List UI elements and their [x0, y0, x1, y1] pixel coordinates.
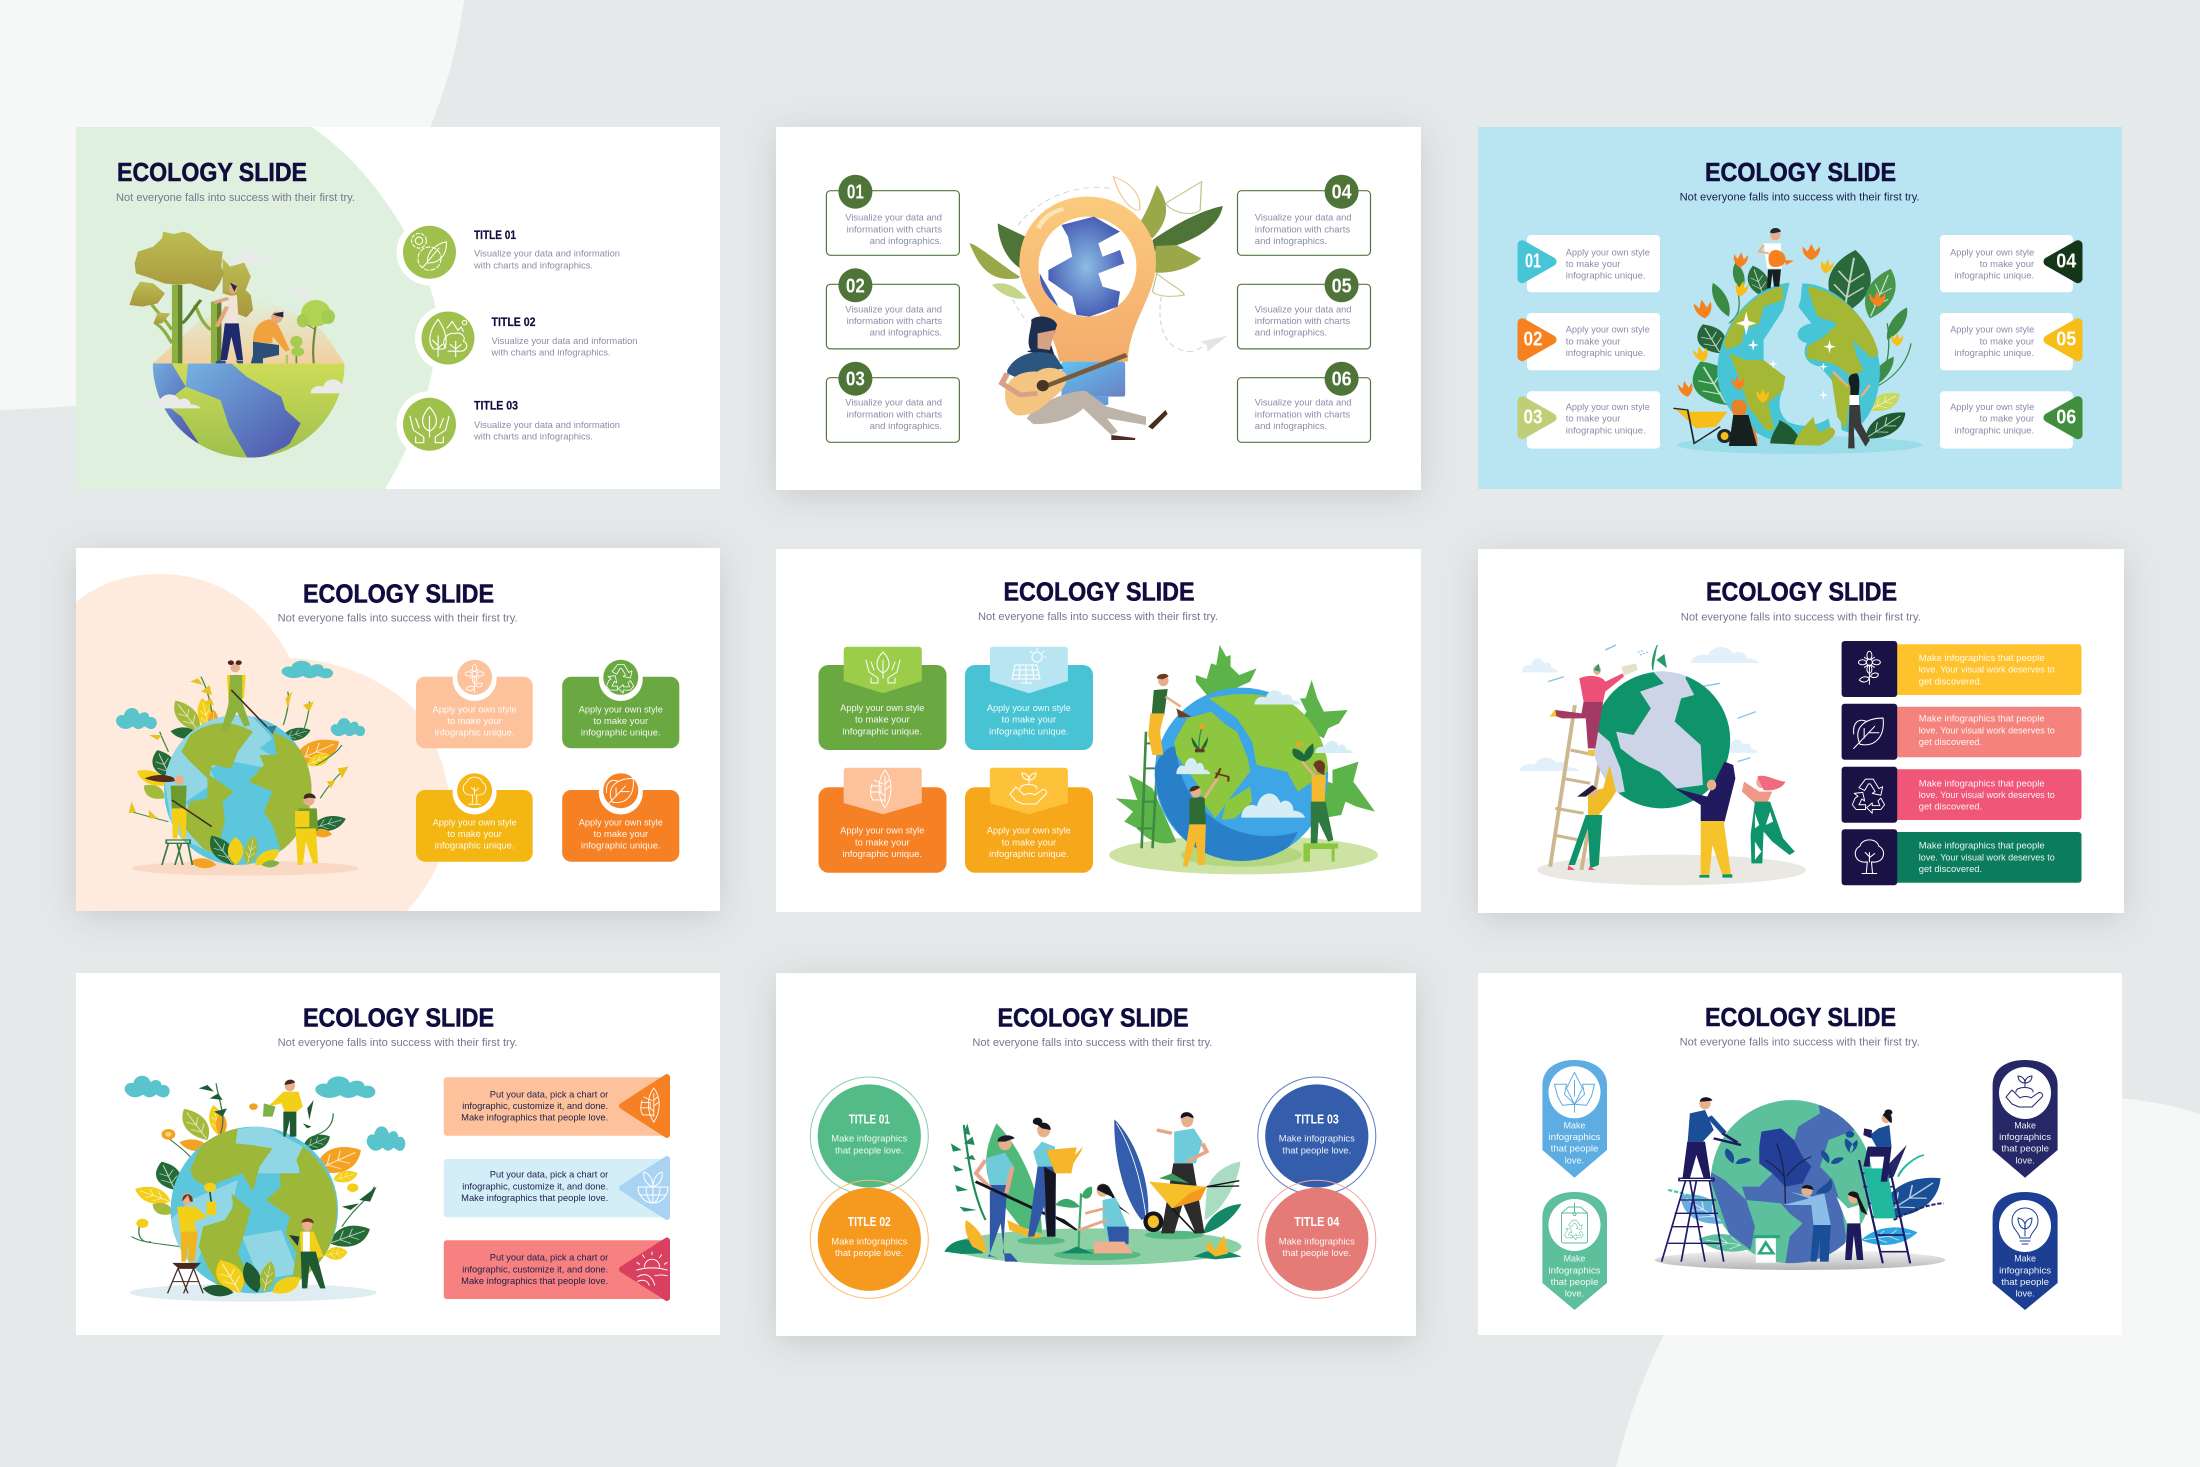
box 05: 05	[1332, 275, 1352, 297]
card 06: infographic unique.	[1954, 425, 2034, 435]
circle: title 01	[810, 1077, 928, 1195]
box 02	[826, 268, 959, 349]
slide 5 background	[776, 549, 1421, 912]
box 04: and infographics.	[1255, 236, 1327, 246]
card: orange: to make your	[855, 837, 910, 847]
card: green: to make your	[855, 715, 910, 725]
icon: bulb with leaves	[2012, 1208, 2038, 1244]
bar 4: green: love. Your visual work deserves to	[1919, 852, 2055, 862]
pin: blue	[1542, 1060, 1607, 1178]
card 05	[1940, 313, 2078, 370]
bar 3: pink	[1842, 767, 2082, 823]
card 05: Apply your own style	[1950, 325, 2034, 335]
item 1: title and text: Visualize your data and information	[474, 249, 620, 259]
slide 1 subtitle: Not everyone falls into success with their first try.	[116, 192, 355, 204]
card 03: Apply your own style	[1566, 402, 1650, 412]
card: yellow: infographic unique.	[435, 841, 514, 851]
slide 6 background	[1478, 549, 2124, 913]
circle: title 04	[1258, 1180, 1376, 1298]
item 3: title and text: TITLE 03	[474, 399, 518, 413]
box 04	[1238, 175, 1370, 255]
box 05: information with charts	[1255, 316, 1351, 326]
card: cyan: infographic unique.	[989, 726, 1069, 736]
card: amber	[965, 768, 1093, 873]
bar 2: coral	[1842, 704, 2082, 760]
arrow card: light blue	[444, 1159, 668, 1217]
item 1: title and text: with charts and infographics.	[473, 260, 593, 270]
pin: green	[1542, 1192, 1607, 1310]
panel: slide 2 six numbered boxes with light bulb	[776, 127, 1421, 490]
icon: leaf	[1854, 718, 1883, 748]
card: orange: infographic unique.	[842, 849, 922, 859]
item 2: icon circle	[415, 305, 481, 371]
box 06: 06	[1332, 369, 1352, 391]
pin: green: infographics	[1548, 1265, 1601, 1275]
box 04: information with charts	[1255, 224, 1351, 234]
card 01	[1522, 235, 1660, 292]
box 02: 02	[846, 275, 865, 297]
bar 3: pink: Make infographics that people	[1919, 778, 2045, 788]
card 02: Apply your own style	[1566, 325, 1650, 335]
slide 1 heading: ECOLOGY SLIDE	[117, 157, 307, 187]
bar 2: coral: get discovered.	[1919, 737, 1982, 747]
pin: royal blue: that people	[2001, 1277, 2049, 1287]
bar 4: green: Make infographics that people	[1919, 841, 2045, 851]
slide 9 heading: ECOLOGY SLIDE	[1705, 1002, 1896, 1032]
card: peach: infographic unique.	[435, 728, 514, 738]
card 01: 01	[1525, 251, 1541, 273]
card: amber: infographic unique.	[989, 849, 1069, 859]
card 05: infographic unique.	[1954, 348, 2034, 358]
icon: recycle	[1852, 779, 1885, 813]
slide 9 illustration: globe with tree planters	[1655, 1097, 1952, 1270]
card 06	[1940, 391, 2078, 449]
icon: recycle	[606, 664, 634, 693]
box 06	[1238, 362, 1370, 442]
item 1: title and text	[473, 228, 620, 270]
card: orange: to make your	[594, 829, 648, 839]
icon: tree	[1855, 840, 1884, 874]
slide 5 illustration: globe with gardeners	[1109, 645, 1378, 874]
circle: title 04: Make infographics	[1279, 1236, 1355, 1246]
box 06: Visualize your data and	[1255, 398, 1352, 408]
pin: royal blue	[1993, 1192, 2058, 1310]
slide 9 background	[1478, 973, 2122, 1335]
pin: navy	[1993, 1060, 2058, 1178]
card 03: infographic unique.	[1566, 425, 1646, 435]
card 03	[1522, 391, 1660, 449]
circle: title 03: Make infographics	[1279, 1134, 1355, 1144]
card: green	[818, 647, 946, 750]
card: yellow: to make your	[447, 829, 502, 839]
circle: title 03	[1258, 1077, 1376, 1195]
card 01: Apply your own style	[1566, 247, 1650, 257]
slide 1 illustration: trees and half earth	[129, 232, 362, 463]
circle: title 01: that people love.	[835, 1145, 904, 1155]
slide 4 background	[76, 548, 720, 911]
card 04	[1940, 235, 2078, 292]
panel: slide 5 four tabbed cards with blue globe	[776, 549, 1421, 912]
box 03: information with charts	[847, 409, 942, 419]
icon: gear and leaf	[412, 233, 446, 270]
card: yellow: Apply your own style	[433, 817, 517, 827]
bar 2: coral: Make infographics that people	[1919, 714, 2045, 724]
card 04: 04	[2056, 251, 2077, 273]
card: peach	[416, 657, 533, 748]
circle: title 03: TITLE 03	[1295, 1112, 1339, 1126]
card: orange	[818, 768, 946, 873]
circle: title 02: TITLE 02	[848, 1215, 891, 1229]
item 2: title and text: with charts and infographics.	[490, 348, 610, 358]
pin: blue: infographics	[1548, 1132, 1601, 1142]
icon: hand with plant	[2006, 1076, 2043, 1107]
box 03: Visualize your data and	[845, 398, 942, 408]
icon: lotus	[1554, 1072, 1594, 1112]
arrow card: orange: Make infographics that people love.	[461, 1113, 608, 1123]
card 02: to make your	[1566, 336, 1620, 346]
circle: title 02	[810, 1180, 928, 1298]
icon: hands and leaf	[410, 407, 449, 443]
box 01	[826, 175, 959, 255]
slide 6 illustration: people lifting globe	[1520, 645, 1806, 885]
icon: globe plant	[638, 1172, 668, 1203]
slide 7 heading: ECOLOGY SLIDE	[303, 1003, 494, 1033]
background shape: bottom-right pale curve	[1616, 1097, 2200, 1467]
arrow card: red	[444, 1240, 668, 1299]
item 3: title and text: with charts and infographics.	[473, 432, 593, 442]
card: peach: Apply your own style	[433, 704, 517, 714]
arrow card: orange: Put your data, pick a chart or	[490, 1089, 608, 1099]
pin: green: that people	[1551, 1277, 1598, 1287]
item 3: title and text: Visualize your data and information	[474, 420, 620, 430]
card: green: infographic unique.	[581, 728, 661, 738]
card: orange	[562, 770, 679, 862]
card 06: Apply your own style	[1950, 402, 2034, 412]
circle: title 01: Make infographics	[831, 1134, 908, 1144]
card: amber: Apply your own style	[987, 826, 1071, 836]
card: yellow	[416, 770, 533, 862]
item 1: title and text: TITLE 01	[474, 228, 516, 242]
arrow card: orange	[444, 1077, 668, 1136]
panel: slide 9 four pin badges with blue and green globe	[1478, 973, 2122, 1335]
icon: tree	[463, 777, 486, 804]
icon: flower	[1858, 651, 1880, 684]
slide 4 illustration: globe with cleaners	[116, 660, 365, 876]
box 05: and infographics.	[1255, 328, 1327, 338]
slide 8 heading: ECOLOGY SLIDE	[998, 1003, 1188, 1033]
slide 8 subtitle: Not everyone falls into success with their first try.	[972, 1037, 1212, 1049]
circle: title 04: that people love.	[1283, 1248, 1351, 1258]
bar 3: pink: get discovered.	[1919, 802, 1982, 812]
box 03: and infographics.	[870, 421, 942, 431]
box 01: 01	[847, 182, 864, 204]
item 2: title and text: Visualize your data and information	[492, 336, 638, 346]
card: peach: to make your	[447, 716, 502, 726]
card 06: 06	[2056, 407, 2076, 429]
arrow card: red: Make infographics that people love.	[461, 1276, 608, 1286]
pin: blue: Make	[1564, 1120, 1585, 1130]
box 02: information with charts	[847, 316, 942, 326]
arrow card: light blue: Make infographics that people love.	[461, 1193, 608, 1203]
pin: blue: love.	[1565, 1155, 1584, 1165]
icon: leaves	[641, 1088, 659, 1122]
pin: blue: that people	[1551, 1144, 1598, 1154]
card: orange: Apply your own style	[840, 826, 924, 836]
card 03: 03	[1524, 407, 1542, 429]
icon: solar panel	[1012, 648, 1046, 683]
card 02	[1522, 313, 1660, 370]
slide 7 background	[76, 973, 720, 1335]
icon: hands and leaf	[866, 652, 900, 683]
card: green: Apply your own style	[840, 703, 924, 713]
icon: flower	[465, 665, 484, 693]
panel: slide 8 four circles with gardeners	[776, 973, 1416, 1336]
pin: green: Make	[1564, 1254, 1585, 1264]
panel: slide 6 four colored bars with people lifting globe	[1478, 549, 2124, 913]
icon: sunrise	[637, 1252, 667, 1285]
card 06: to make your	[1980, 414, 2034, 424]
bar 1: yellow: get discovered.	[1919, 676, 1982, 686]
card: orange: infographic unique.	[581, 841, 661, 851]
item 3: icon circle	[396, 391, 462, 457]
circle: title 02: that people love.	[835, 1248, 904, 1258]
icon: leaf	[606, 778, 633, 806]
circle: title 01: TITLE 01	[849, 1112, 890, 1126]
pin: royal blue: love.	[2015, 1289, 2035, 1299]
bar 3: pink: love. Your visual work deserves to	[1919, 790, 2055, 800]
arrow card: red: infographic, customize it, and done.	[462, 1264, 608, 1274]
background shape: top-left pale curve	[0, 0, 464, 410]
arrow card: light blue: Put your data, pick a chart or	[490, 1170, 608, 1180]
slide 8 illustration: gardeners planting	[944, 1112, 1241, 1265]
slide 3 illustration: split globe with plants	[1673, 228, 1922, 454]
slide 8 background	[776, 973, 1416, 1336]
box 05	[1238, 268, 1370, 349]
pin: navy: that people	[2001, 1144, 2049, 1154]
card: green: to make your	[594, 716, 648, 726]
box 01: and infographics.	[870, 236, 942, 246]
panel: slide 7 three arrow cards with leafy globe	[76, 973, 720, 1335]
slide 2 illustration: bulb, earth and guitarist	[969, 177, 1228, 440]
pin: navy: infographics	[1999, 1132, 2051, 1142]
box 04: 04	[1332, 182, 1352, 204]
box 03: 03	[846, 369, 865, 391]
pin: green: love.	[1565, 1289, 1584, 1299]
card: amber: to make your	[1002, 837, 1056, 847]
icon: hand with plant	[1010, 773, 1047, 804]
slide 6 subtitle: Not everyone falls into success with their first try.	[1681, 611, 1921, 623]
slide 4 peach blob	[76, 574, 450, 911]
item 1: icon circle	[396, 219, 462, 285]
arrow card: red: Put your data, pick a chart or	[490, 1253, 608, 1263]
card 02: infographic unique.	[1566, 348, 1646, 358]
box 01: information with charts	[847, 224, 942, 234]
pin: navy: love.	[2015, 1155, 2035, 1165]
slide 5 subtitle: Not everyone falls into success with their first try.	[978, 611, 1218, 623]
box 02: and infographics.	[870, 328, 942, 338]
card 03: to make your	[1566, 414, 1620, 424]
card 05: to make your	[1980, 336, 2034, 346]
card 02: 02	[1524, 329, 1542, 351]
slide 7 illustration: globe with gardeners	[125, 1076, 405, 1302]
item 2: title and text	[490, 315, 638, 358]
card 04: infographic unique.	[1954, 271, 2034, 281]
card 04: to make your	[1980, 259, 2034, 269]
box 03	[826, 362, 959, 442]
card: cyan	[965, 647, 1093, 750]
arrow card: orange: infographic, customize it, and done.	[462, 1101, 608, 1111]
icon: recycle bag	[1562, 1203, 1588, 1243]
box 06: information with charts	[1255, 409, 1351, 419]
card: cyan: to make your	[1002, 715, 1056, 725]
slide 5 heading: ECOLOGY SLIDE	[1004, 577, 1194, 607]
box 06: and infographics.	[1255, 421, 1327, 431]
slide 6 heading: ECOLOGY SLIDE	[1706, 577, 1897, 607]
panel: slide 1 three titles with half globe	[76, 127, 720, 489]
panel: slide 4 peach blob with four notched cards	[76, 548, 720, 911]
slide 3 background	[1478, 127, 2122, 489]
card: green	[562, 657, 679, 748]
slide 2 background	[776, 127, 1421, 490]
bar 1: yellow	[1842, 641, 2082, 697]
slide 3 heading: ECOLOGY SLIDE	[1705, 157, 1896, 187]
box 02: Visualize your data and	[845, 304, 942, 314]
slide 7 subtitle: Not everyone falls into success with their first try.	[278, 1037, 518, 1049]
slide 3 subtitle: Not everyone falls into success with their first try.	[1680, 192, 1920, 204]
panel: slide 3 blue background with split globe	[1478, 127, 2122, 489]
slide 1 background	[76, 127, 720, 489]
card: orange: Apply your own style	[579, 817, 663, 827]
slide 1 green arc backdrop	[76, 127, 437, 489]
box 01: Visualize your data and	[845, 213, 942, 223]
circle: title 02: Make infographics	[831, 1236, 908, 1246]
card 01: to make your	[1566, 259, 1620, 269]
pin: royal blue: Make	[2014, 1254, 2036, 1264]
bar 2: coral: love. Your visual work deserves to	[1919, 725, 2055, 735]
pin: navy: Make	[2014, 1120, 2036, 1130]
box 04: Visualize your data and	[1255, 213, 1352, 223]
item 2: title and text: TITLE 02	[492, 315, 536, 329]
card: cyan: Apply your own style	[987, 703, 1071, 713]
bar 4: green	[1842, 829, 2082, 885]
box 05: Visualize your data and	[1255, 304, 1352, 314]
circle: title 04: TITLE 04	[1294, 1215, 1339, 1229]
bar 4: green: get discovered.	[1919, 864, 1982, 874]
card 04: Apply your own style	[1950, 247, 2034, 257]
bar 1: yellow: love. Your visual work deserves to	[1919, 665, 2055, 675]
slide 9 subtitle: Not everyone falls into success with their first try.	[1680, 1037, 1920, 1049]
slide 4 heading: ECOLOGY SLIDE	[303, 579, 494, 609]
pin: royal blue: infographics	[1999, 1265, 2051, 1275]
card: green: Apply your own style	[579, 704, 663, 714]
icon: hand and leaf	[871, 770, 891, 808]
card 01: infographic unique.	[1566, 271, 1646, 281]
card 05: 05	[2056, 329, 2076, 351]
arrow card: light blue: infographic, customize it, and done.	[462, 1181, 608, 1191]
circle: title 03: that people love.	[1283, 1145, 1351, 1155]
slide 4 subtitle: Not everyone falls into success with their first try.	[278, 613, 518, 625]
bar 1: yellow: Make infographics that people	[1919, 653, 2045, 663]
icon: trees	[430, 319, 467, 357]
item 3: title and text	[473, 399, 620, 442]
card: green: infographic unique.	[842, 726, 922, 736]
